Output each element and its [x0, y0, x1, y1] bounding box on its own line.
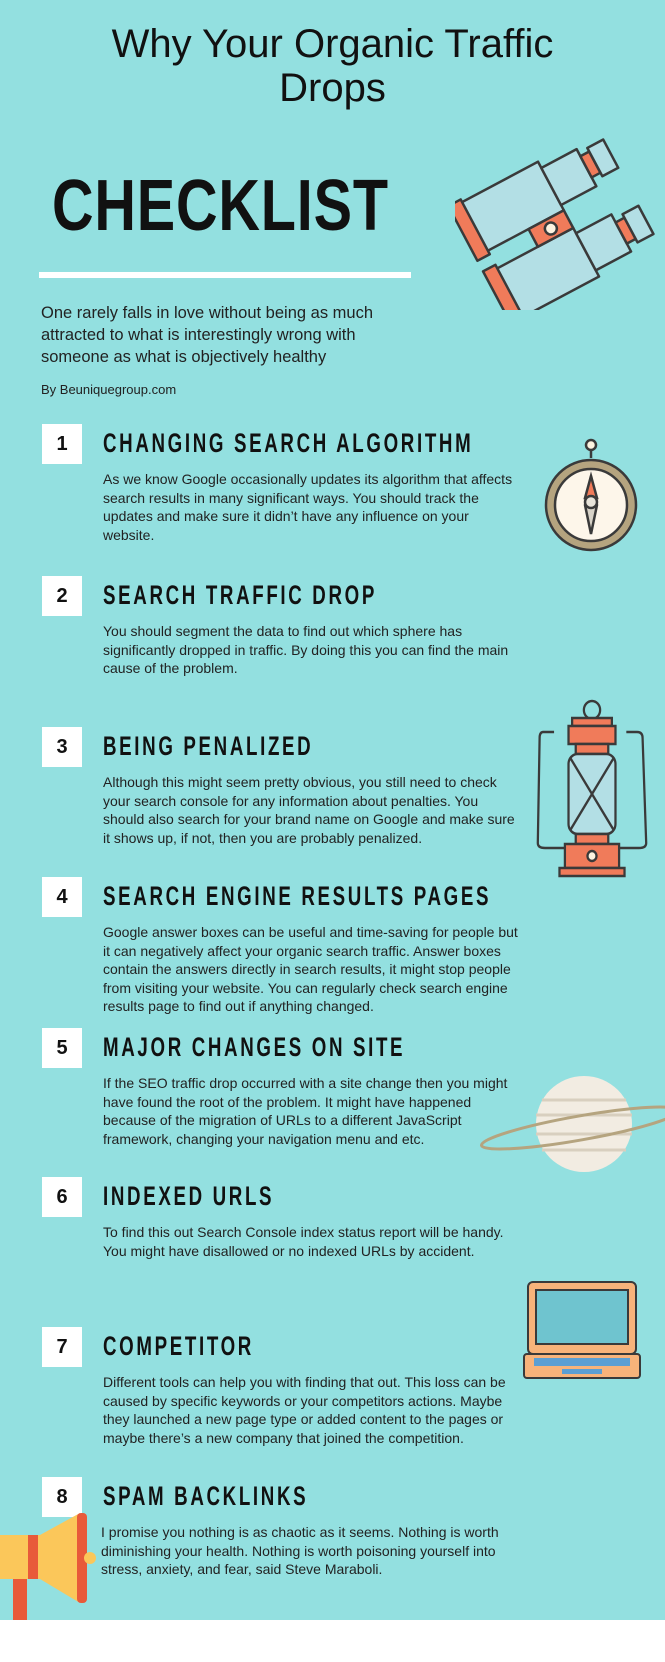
- body 5: If the SEO traffic drop occurred with a site change then you might have found the root of the problem. It might have happened because of the migration of URLs to a different JavaScript framework, changing your navigation menu and etc.: [103, 1075, 507, 1147]
- title: [112, 22, 553, 110]
- title: Why Your Organic Traffic: [112, 22, 553, 66]
- section 7: [42, 1327, 506, 1446]
- number 6: 6: [56, 1186, 68, 1208]
- number 4: 4: [56, 886, 68, 908]
- number 6: [42, 1177, 82, 1217]
- heading 3: BEING PENALIZED: [103, 731, 313, 762]
- section 6: [42, 1177, 504, 1259]
- icon: lantern: [536, 700, 648, 878]
- body 3: Although this might seem pretty obvious, you still need to check your search console for any information about penalties. You should also search for your brand name on Google and make sure it shows up, if not, then you are probably penalized.: [103, 774, 515, 846]
- heading 5: MAJOR CHANGES ON SITE: [103, 1032, 405, 1063]
- icon: laptop: [523, 1281, 641, 1379]
- body 6: To find this out Search Console index status report will be handy. You might have disallowed or no indexed URLs by accident.: [103, 1224, 504, 1259]
- heading 1: CHANGING SEARCH ALGORITHM: [103, 428, 473, 459]
- section 8: [42, 1477, 499, 1577]
- icon: binoculars: [455, 138, 655, 310]
- icon: compass: [544, 438, 638, 552]
- icon: megaphone: [0, 1513, 96, 1620]
- heading 2: SEARCH TRAFFIC DROP: [103, 580, 377, 611]
- number 2: 2: [56, 585, 68, 607]
- number 4: [42, 877, 82, 917]
- body 8: I promise you nothing is as chaotic as it seems. Nothing is worth diminishing your health. Nothing is worth poisoning yourself into stress, anxiety, and fear, said Steve Maraboli.: [101, 1524, 499, 1577]
- section 4: [42, 877, 518, 1014]
- number 7: [42, 1327, 82, 1367]
- white divider: [39, 272, 411, 278]
- section 2: [42, 576, 508, 676]
- number 3: [42, 727, 82, 767]
- body 2: You should segment the data to find out which sphere has significantly dropped in traffic. By doing this you can find the main cause of the problem.: [103, 623, 508, 676]
- title: Drops: [279, 66, 386, 110]
- checklist heading: CHECKLIST: [52, 166, 389, 246]
- number 5: 5: [56, 1037, 68, 1059]
- intro paragraph: One rarely falls in love without being as much attracted to what is interestingly wrong with someone as what is objectively healthy: [41, 304, 373, 366]
- number 8: [42, 1477, 82, 1517]
- section 3: [42, 727, 515, 846]
- section 5: [42, 1028, 508, 1147]
- body 4: Google answer boxes can be useful and time-saving for people but it can negatively affect your organic search traffic. Answer boxes contain the answers directly in search results, it might stop people from visiting your website. You can regularly check search engine results page to find out if anything changed.: [103, 924, 518, 1014]
- number 7: 7: [56, 1336, 68, 1358]
- heading 8: SPAM BACKLINKS: [103, 1481, 308, 1512]
- heading 6: INDEXED URLS: [103, 1181, 274, 1212]
- number 1: [42, 424, 82, 464]
- body 7: Different tools can help you with finding that out. This loss can be caused by specific keywords or your competitors actions. Maybe they launched a new page type or added content to the pages or maybe there’s a new company that joined the competition.: [103, 1374, 506, 1446]
- heading 7: COMPETITOR: [103, 1331, 254, 1362]
- heading 4: SEARCH ENGINE RESULTS PAGES: [103, 881, 491, 912]
- number 2: [42, 576, 82, 616]
- number 5: [42, 1028, 82, 1068]
- section 1: [42, 424, 512, 543]
- icon: planet: [480, 1076, 665, 1172]
- number 3: 3: [56, 736, 68, 758]
- byline: By Beuniquegroup.com: [41, 382, 176, 397]
- number 1: 1: [56, 433, 68, 455]
- number 8: 8: [56, 1486, 68, 1508]
- body 1: As we know Google occasionally updates its algorithm that affects search results in many significant ways. You should track the updates and make sure it didn’t have any influence on your website.: [103, 471, 512, 543]
